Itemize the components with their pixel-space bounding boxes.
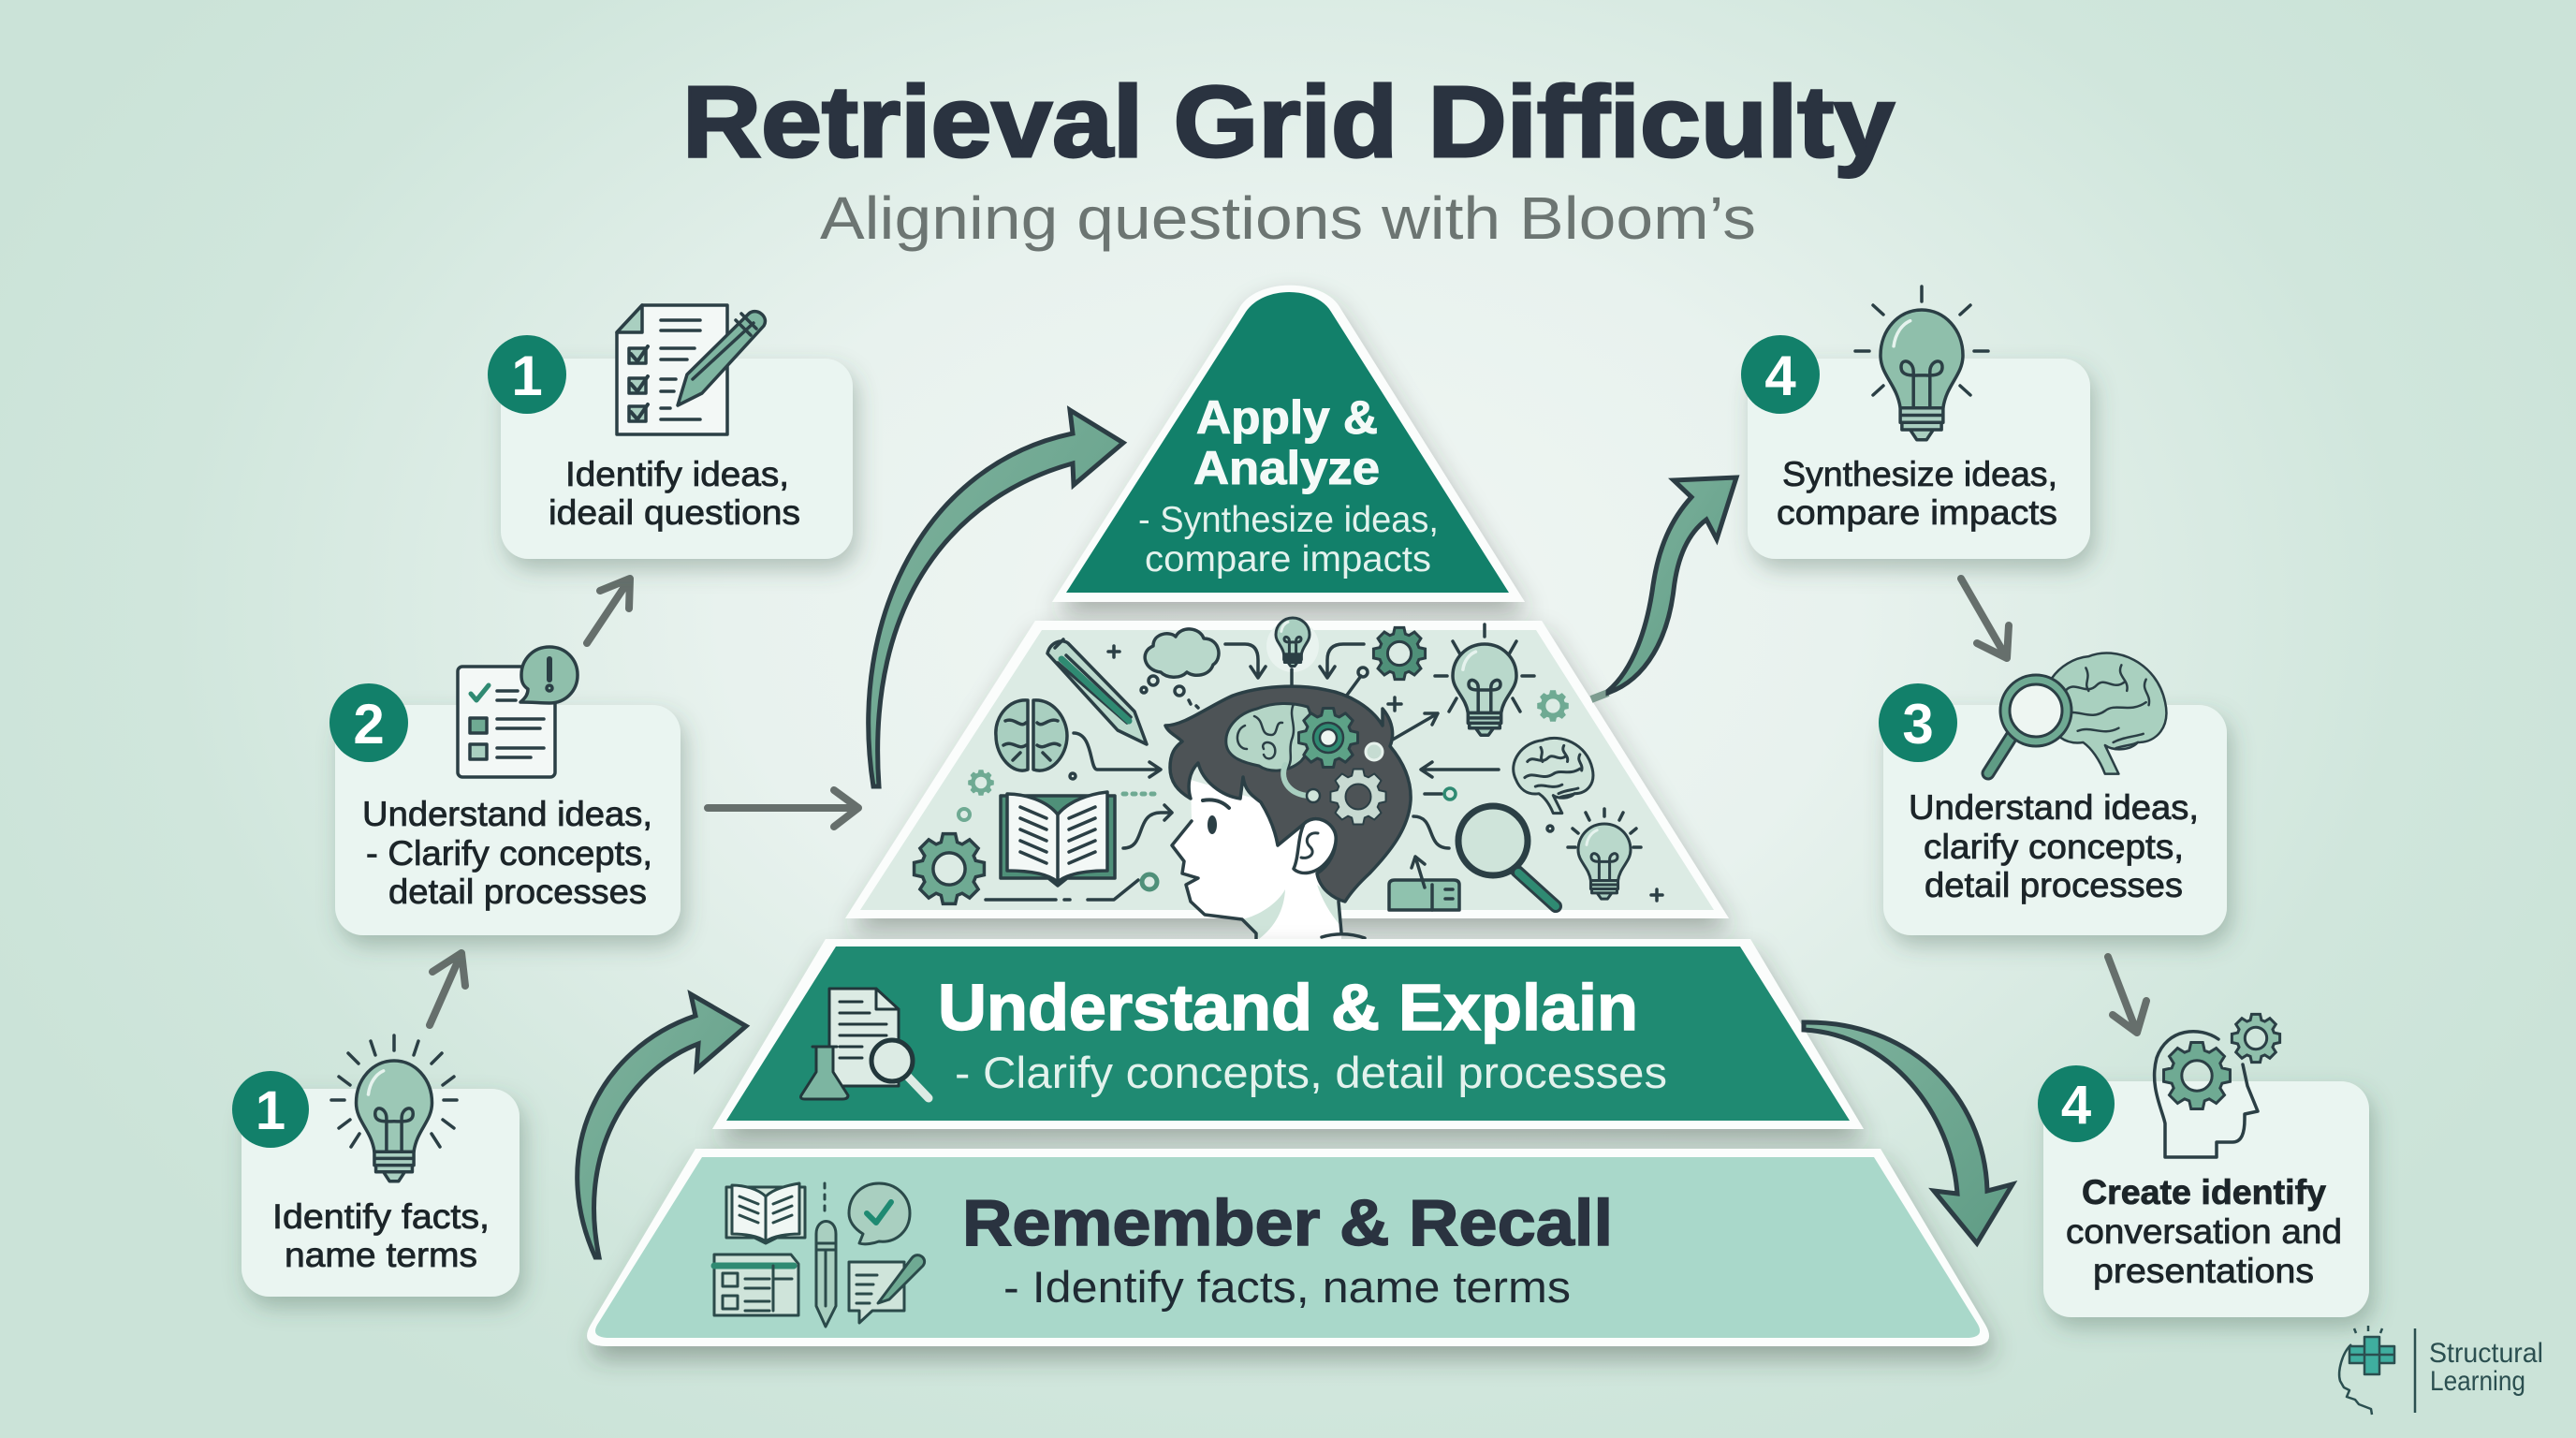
icon: checklist with pencil [617,305,765,434]
logo: Structural Learning: Learning [2430,1366,2525,1397]
curved arrow: to understand tier [578,994,746,1257]
eye and brow [1208,815,1217,834]
pyramid tier: illustration of thinking head [845,618,1729,943]
pyramid tier: Apply & Analyze [1052,286,1525,602]
connector arrows [959,644,1662,901]
curved arrow: down to right card [1804,1022,2012,1243]
gear lower in head [1330,769,1386,825]
pyramid tier: Apply & Analyze: Apply & [1196,391,1378,444]
pyramid tier: Remember & Recall [587,1149,1989,1346]
icon: thought dots [1141,676,1198,708]
card: create identify: 4 [2061,1075,2091,1136]
icon: checklist with alert bubble [458,647,578,777]
icon: bulb bottom right [1568,809,1641,899]
pyramid tier: Apply & Analyze: - Synthesize ideas, [1138,500,1439,540]
badge 4 [1741,335,1820,414]
badge 1 [232,1071,309,1148]
neck shadows [1242,885,1341,939]
badge 4 [2038,1065,2115,1142]
icon: brain with magnifier [1988,653,2166,774]
pyramid tier: Remember & Recall: Remember & Recall [962,1186,1613,1259]
icon: book [1001,792,1115,886]
pyramid tier: Apply & Analyze: Analyze [1193,442,1380,494]
card: understand ideas left: 2 [353,693,385,756]
card: identify ideas [488,305,853,559]
pyramid tier: Understand & Explain [712,939,1864,1129]
illustration: boy head [1165,686,1411,943]
pyramid tier: Understand & Explain: Understand & Explain [938,971,1638,1044]
card: understand ideas left [329,647,681,935]
card: synthesize ideas: 4 [1764,345,1796,407]
logo mark: head and blocks [2339,1326,2394,1415]
card: create identify: conversation and [2066,1212,2342,1251]
card: understand ideas right: clarify concepts, [1924,828,2184,866]
card: identify ideas: Identify ideas, [565,455,789,493]
icon: lightbulb [1855,286,1988,440]
arrow: synthesize to understand [1961,579,2009,658]
card: understand ideas right: detail processes [1925,866,2183,904]
card: identify facts: 1 [256,1080,285,1141]
icon: small bulb top [1266,618,1319,672]
pyramid tier: Apply & Analyze: compare impacts [1145,539,1431,580]
icon: document, flask and magnifier [801,989,929,1099]
logo: Structural Learning: Structural [2429,1338,2543,1369]
card: synthesize ideas: Synthesize ideas, [1782,455,2057,493]
card: identify ideas: ideail questions [549,493,800,532]
card: identify facts: Identify facts, [272,1197,490,1236]
card: understand ideas right [1879,653,2227,935]
icon: ruler document [1389,857,1459,910]
card: understand ideas left: - Clarify concepts, [366,834,652,873]
card: create identify: Create identify [2082,1173,2326,1211]
icon: gear top right [1373,627,1426,680]
icon: small gear right [1537,690,1569,722]
icon: brain top view [996,700,1067,770]
brain in head [1226,703,1320,802]
icon: magnifier [1458,806,1556,906]
curved arrow: to apex [869,410,1123,786]
card: identify ideas: 1 [511,345,543,407]
card: identify facts [232,1035,520,1297]
card: understand ideas right: 3 [1902,693,1934,756]
card: synthesize ideas: compare impacts [1777,493,2057,532]
card: identify facts: name terms [285,1236,477,1274]
pyramid tier: Remember & Recall: - Identify facts, name terms [1003,1262,1571,1312]
card: understand ideas right: Understand ideas, [1909,788,2199,827]
subtitle: Aligning questions with Bloom’s [820,184,1756,252]
icon: cloud [1145,629,1219,677]
badge 3 [1879,683,1957,762]
card: synthesize ideas [1741,286,2090,559]
hair [1165,686,1411,902]
card: create identify: presentations [2093,1252,2314,1290]
badge 1 [488,335,566,414]
title: Retrieval Grid Difficulty [682,65,1895,178]
face and neck [1172,780,1341,943]
arrow: card 2 to card 1 top [587,579,630,643]
card: understand ideas left: detail processes [388,873,647,911]
card: create identify [2038,1014,2369,1317]
icon: gear bottom left [915,834,984,903]
probe node [1366,743,1383,760]
icon: small gear left [968,770,994,796]
arrow: card 1 to card 2 [430,953,465,1025]
icon: lightbulb [331,1035,457,1181]
icon: big bulb with rays [1435,624,1534,735]
badge 2 [329,683,408,762]
icon: pencil [1047,639,1147,744]
curved arrow: to right column [1591,477,1736,699]
icon: head with gears [2155,1014,2280,1157]
pyramid tier: Understand & Explain: - Clarify concepts, detail processes [955,1048,1667,1097]
logo: Structural Learning [2339,1326,2543,1415]
card: understand ideas left: Understand ideas, [362,795,652,833]
arrow: card 2 to pyramid [708,790,858,827]
gear in head [1298,708,1358,768]
arrow: understand to create [2108,957,2146,1033]
face profile line [1172,821,1365,943]
icon: brain side view right [1514,738,1593,814]
ear [1294,819,1336,873]
icon: study tools [714,1183,925,1327]
